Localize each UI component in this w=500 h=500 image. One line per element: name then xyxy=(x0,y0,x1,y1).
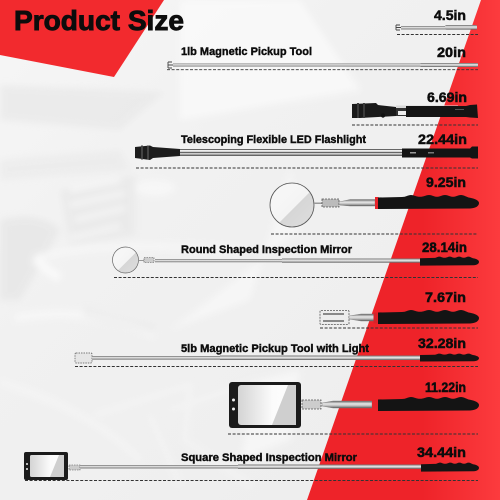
tool row: 6.69in flashlight xyxy=(352,89,478,125)
measurement: 9.25in: 9.25in xyxy=(426,174,466,190)
icon: collapsed square mirror xyxy=(229,382,479,428)
label: Round Shaped Inspection Mirror: Round Shaped Inspection Mirror xyxy=(181,244,353,256)
icon: extended pickup tool xyxy=(168,62,478,68)
label: 5lb Magnetic Pickup Tool with Light: 5lb Magnetic Pickup Tool with Light xyxy=(181,343,369,355)
tool row: 20in magnetic pickup tool xyxy=(167,44,478,70)
label: Square Shaped Inspection Mirror: Square Shaped Inspection Mirror xyxy=(181,452,358,464)
icon: extended flashlight xyxy=(135,146,478,160)
icon: extended square mirror xyxy=(24,452,479,480)
tool row: 34.44in square mirror xyxy=(24,444,479,480)
measurement: 6.69in: 6.69in xyxy=(427,89,467,105)
red wedge: right side xyxy=(307,0,500,500)
icon: collapsed pickup tool xyxy=(396,25,477,30)
icon: collapsed flashlight xyxy=(352,103,478,118)
measurement: 7.67in: 7.67in xyxy=(425,289,466,305)
title: Product Size xyxy=(14,5,184,36)
tool row: 9.25in round mirror xyxy=(270,174,479,234)
measurement: 20in: 20in xyxy=(437,44,466,60)
tool row: 22.44in flashlight xyxy=(135,131,478,168)
measurement: 34.44in: 34.44in xyxy=(417,444,466,460)
icon: extended pickup tool with light xyxy=(75,353,479,363)
tool row: 4.5in magnetic pickup tool xyxy=(396,7,478,34)
measurement: 28.14in: 28.14in xyxy=(422,239,467,255)
tool row: 28.14in round mirror xyxy=(112,239,479,278)
icon: collapsed pickup tool with light xyxy=(320,310,479,324)
red wedge: top left xyxy=(0,0,164,77)
measurement: 4.5in: 4.5in xyxy=(434,7,466,23)
measurement: 22.44in: 22.44in xyxy=(418,131,467,147)
label: Telescoping Flexible LED Flashlight: Telescoping Flexible LED Flashlight xyxy=(181,134,366,146)
tool row: 32.28in pickup tool with light xyxy=(75,335,479,366)
measurement: 32.28in: 32.28in xyxy=(418,335,466,351)
icon: extended round mirror xyxy=(112,247,479,273)
tool row: 11.22in square mirror xyxy=(228,379,479,434)
label: 1lb Magnetic Pickup Tool: 1lb Magnetic Pickup Tool xyxy=(181,46,312,58)
measurement: 11.22in: 11.22in xyxy=(425,379,466,395)
icon: collapsed round mirror xyxy=(270,183,479,227)
tool row: 7.67in pickup tool with light xyxy=(320,289,479,328)
